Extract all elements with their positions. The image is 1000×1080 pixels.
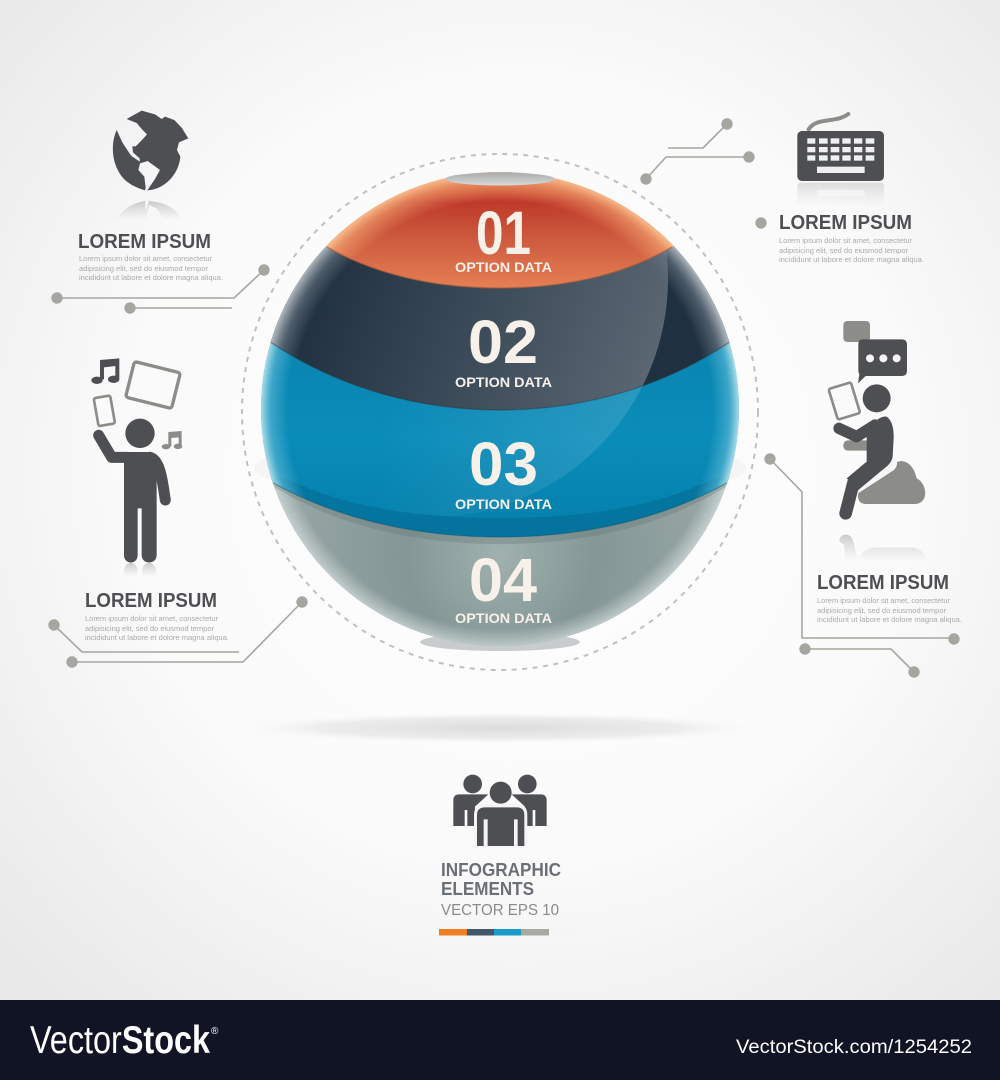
text block: top right: Lorem ipsum dolor sit amet, consectetur xyxy=(779,236,913,245)
sphere xyxy=(261,172,739,651)
reflection xyxy=(124,563,156,577)
text block: right: LOREM IPSUM xyxy=(817,572,949,594)
bottom title: ELEMENTS xyxy=(441,878,534,899)
figure xyxy=(112,419,157,562)
grey speech bubble xyxy=(843,321,872,348)
label 03: 03 xyxy=(469,430,538,498)
label 01: 01 xyxy=(476,199,531,267)
music note large xyxy=(91,358,119,384)
keys xyxy=(807,138,874,173)
footer logo: VectorStock xyxy=(30,1019,210,1062)
icon: keyboard xyxy=(797,114,884,207)
connector: right xyxy=(764,453,960,678)
reflection xyxy=(839,535,926,562)
bullet dot: top right xyxy=(755,217,767,229)
text block: top left: incididunt ut labore et dolore magna aliqua. xyxy=(79,273,223,282)
phone xyxy=(94,395,115,426)
dashed orbit ring xyxy=(242,154,758,670)
text block: right xyxy=(817,572,962,624)
label 03 xyxy=(455,430,552,512)
icon: person with devices and music xyxy=(91,358,182,577)
text block: middle left: LOREM IPSUM xyxy=(85,590,217,612)
text block: middle left xyxy=(85,590,229,642)
text block: middle left: Lorem ipsum dolor sit amet, consectetur xyxy=(85,614,219,623)
text block: right: Lorem ipsum dolor sit amet, consectetur xyxy=(817,596,951,605)
text block: top right: adipisicing elit, sed do eiusmod tempor xyxy=(779,246,909,255)
colour legend bar xyxy=(439,929,577,936)
sphere bottom cap xyxy=(420,633,580,651)
label 02: 02 xyxy=(468,308,538,376)
registered mark: ® xyxy=(211,1026,219,1037)
label 04: OPTION DATA xyxy=(455,610,552,626)
label 02: OPTION DATA xyxy=(455,374,552,390)
label 04: 04 xyxy=(469,546,537,614)
label 01 xyxy=(455,199,552,275)
icon: person on cloud with tablet and chat xyxy=(828,321,926,562)
keyboard body xyxy=(797,131,884,181)
label 02 xyxy=(455,308,552,390)
globe reflection xyxy=(117,201,182,220)
bottom title: INFOGRAPHIC xyxy=(441,859,561,880)
music note small xyxy=(162,431,182,449)
text block: top right: LOREM IPSUM xyxy=(779,212,912,234)
label 04 xyxy=(455,546,552,626)
footer url: VectorStock.com/1254252 xyxy=(736,1036,972,1058)
connector: top left xyxy=(51,264,270,314)
connector: top right xyxy=(640,118,755,185)
sphere floor shadow xyxy=(245,713,755,743)
text block: top right xyxy=(779,212,924,264)
band 03: blue xyxy=(261,320,739,538)
text block: top right: incididunt ut labore et dolore magna aliqua. xyxy=(779,255,924,264)
cloud seat xyxy=(858,461,925,504)
icon: group of people xyxy=(453,775,547,847)
bottom title: VECTOR EPS 10 xyxy=(441,902,559,919)
text block: top left: LOREM IPSUM xyxy=(78,231,211,253)
dark speech bubble xyxy=(858,339,907,383)
figure outline xyxy=(855,463,888,485)
figure xyxy=(839,384,894,513)
label 01: OPTION DATA xyxy=(455,259,552,275)
text block: right: adipisicing elit, sed do eiusmod tempor xyxy=(817,606,947,615)
text block: middle left: adipisicing elit, sed do eiusmod tempor xyxy=(85,624,215,633)
tablet xyxy=(828,382,860,420)
text block: top left xyxy=(78,231,223,282)
text block: top left: adipisicing elit, sed do eiusmod tempor xyxy=(79,264,209,273)
icon: globe xyxy=(113,111,188,220)
footer bar xyxy=(0,1000,1000,1080)
text block: right: incididunt ut labore et dolore magna aliqua. xyxy=(817,615,962,624)
connector: lower left xyxy=(48,596,308,668)
bottom title xyxy=(441,859,561,919)
top cap opening xyxy=(445,172,555,186)
text block: top left: Lorem ipsum dolor sit amet, consectetur xyxy=(79,254,213,263)
text block: middle left: incididunt ut labore et dolore magna aliqua. xyxy=(85,633,229,642)
band 02: dark slate xyxy=(270,230,730,411)
small cloud under arm xyxy=(843,440,870,451)
tablet xyxy=(126,361,180,409)
band 04: grey xyxy=(255,440,745,655)
keyboard reflection xyxy=(797,183,884,207)
band 01: red-orange xyxy=(326,172,674,289)
label 03: OPTION DATA xyxy=(455,496,552,512)
faint disc behind sphere xyxy=(254,436,746,500)
keyboard cable xyxy=(809,114,848,129)
